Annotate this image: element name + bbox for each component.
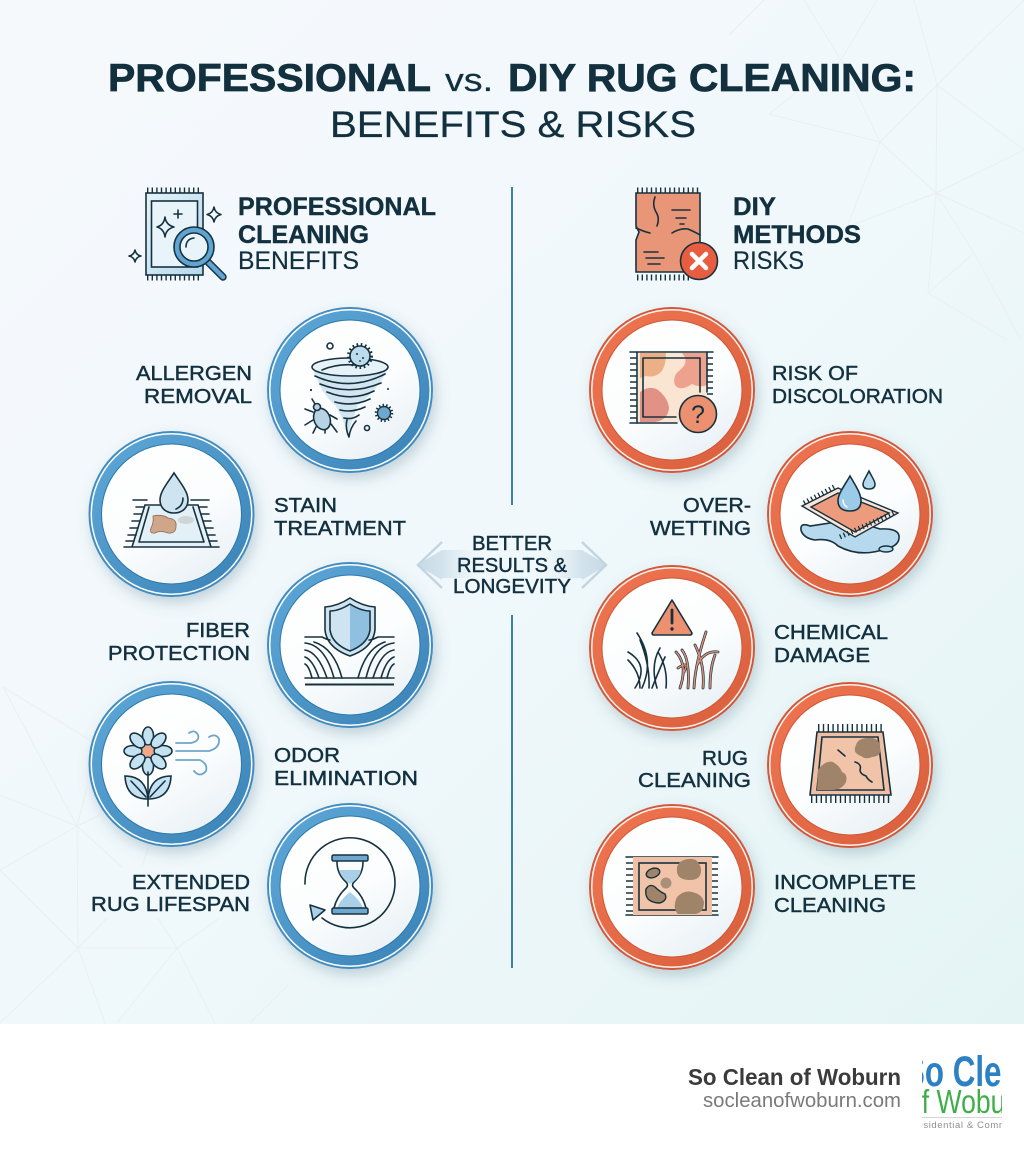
- heading: DIY methods risks: METHODS: [733, 221, 861, 249]
- heading: professional cleaning benefits: PROFESSIONAL: [238, 193, 436, 221]
- ring: [267, 803, 433, 969]
- label: DISCOLORATION: [772, 386, 943, 408]
- label: RUG LIFESPAN: [91, 894, 250, 916]
- label: [638, 748, 751, 792]
- label: WETTING: [650, 518, 751, 540]
- item: rug cleaning: [638, 682, 933, 848]
- ring: [767, 431, 933, 597]
- footer logo (cropped): [922, 1055, 1002, 1128]
- label: CLEANING: [638, 770, 751, 792]
- label: OVER-: [683, 495, 751, 517]
- item: incomplete cleaning: [589, 804, 916, 970]
- label: [274, 495, 406, 540]
- title: BENEFITS & RISKS: [330, 104, 696, 145]
- item: over-wetting: [650, 431, 933, 597]
- item: fiber protection: [108, 562, 433, 728]
- ring: [589, 565, 755, 731]
- arrow: left: [417, 542, 482, 588]
- label: ODOR: [274, 745, 340, 767]
- icon: discolored rug with question mark: ?: [691, 401, 705, 429]
- heading: professional cleaning benefits: CLEANING: [238, 221, 369, 249]
- item: risk of discoloration: [589, 307, 943, 473]
- heading: DIY methods risks: RISKS: [733, 247, 804, 275]
- label: PROTECTION: [108, 643, 250, 665]
- icon: shield over fibers: [305, 598, 394, 684]
- callout text: [453, 533, 571, 598]
- title: DIY RUG CLEANING:: [508, 57, 916, 100]
- ring: [267, 307, 433, 473]
- header icon: damaged rug with x badge: [636, 190, 718, 280]
- label: [136, 363, 252, 408]
- label: INCOMPLETE: [774, 872, 916, 894]
- item: stain treatment: [88, 431, 406, 597]
- arrow: right: [542, 542, 607, 588]
- ring: [88, 681, 254, 847]
- background geometric lines: top right: [729, 0, 1024, 340]
- label: FIBER: [186, 620, 250, 642]
- footer brand text: [688, 1064, 901, 1112]
- title: vs.: [445, 62, 493, 98]
- ring: [88, 431, 254, 597]
- heading: professional cleaning benefits: BENEFITS: [238, 247, 359, 275]
- label: [772, 363, 943, 408]
- label: ALLERGEN: [136, 363, 252, 385]
- icon: warning sign with damaged fibers: [628, 600, 718, 688]
- item: chemical damage: [589, 565, 888, 731]
- item: allergen removal: [136, 307, 433, 473]
- center callout: better results and longevity: [417, 533, 607, 598]
- icon: stained rug with cracks: [810, 728, 891, 799]
- ring: [589, 804, 755, 970]
- label: [274, 745, 418, 790]
- label: [650, 495, 751, 540]
- footer background: [0, 1024, 1024, 1154]
- title: PROFESSIONAL: [108, 57, 431, 100]
- icon: hourglass with cycle arrow: [305, 838, 395, 928]
- label: CLEANING: [774, 895, 886, 917]
- panel: professional cleaning benefits: [88, 190, 436, 969]
- footer brand text: socleanofwoburn.com: [703, 1090, 901, 1112]
- icon: flower with breeze: [124, 727, 219, 806]
- callout text: RESULTS &: [457, 555, 568, 577]
- ring: [589, 307, 755, 473]
- callout text: LONGEVITY: [453, 576, 571, 598]
- item: extended rug lifespan: [91, 803, 433, 969]
- icon: rug with leftover stains: [626, 857, 718, 915]
- label: [774, 622, 888, 667]
- label: TREATMENT: [274, 518, 406, 540]
- callout text: BETTER: [472, 533, 552, 555]
- label: RISK OF: [772, 363, 858, 385]
- heading: professional cleaning benefits: [238, 193, 436, 275]
- label: REMOVAL: [144, 386, 252, 408]
- label: DAMAGE: [774, 645, 870, 667]
- item: odor elimination: [88, 681, 418, 847]
- label: [774, 872, 916, 917]
- label: ELIMINATION: [274, 768, 418, 790]
- label: STAIN: [274, 495, 337, 517]
- label: RUG: [702, 748, 748, 770]
- ring: [267, 562, 433, 728]
- label: [108, 620, 250, 665]
- heading: DIY methods risks: DIY: [733, 193, 776, 221]
- label: [91, 872, 250, 916]
- title: [108, 57, 916, 145]
- heading: DIY methods risks: [733, 193, 861, 275]
- footer brand text: So Clean of Woburn: [688, 1064, 901, 1090]
- label: CHEMICAL: [774, 622, 888, 644]
- ring: [767, 682, 933, 848]
- header icon: rug with magnifier: [129, 190, 223, 278]
- panel: DIY methods risks: [589, 190, 943, 970]
- icon: discolored rug with question mark: [630, 352, 716, 432]
- icon: drop on stained rug: [124, 473, 219, 547]
- icon: soaked rug in puddle: [801, 471, 899, 553]
- background geometric lines: bottom left: [0, 687, 288, 1023]
- center divider: [511, 187, 513, 968]
- label: EXTENDED: [132, 872, 250, 894]
- icon: tornado with allergens: [305, 343, 392, 437]
